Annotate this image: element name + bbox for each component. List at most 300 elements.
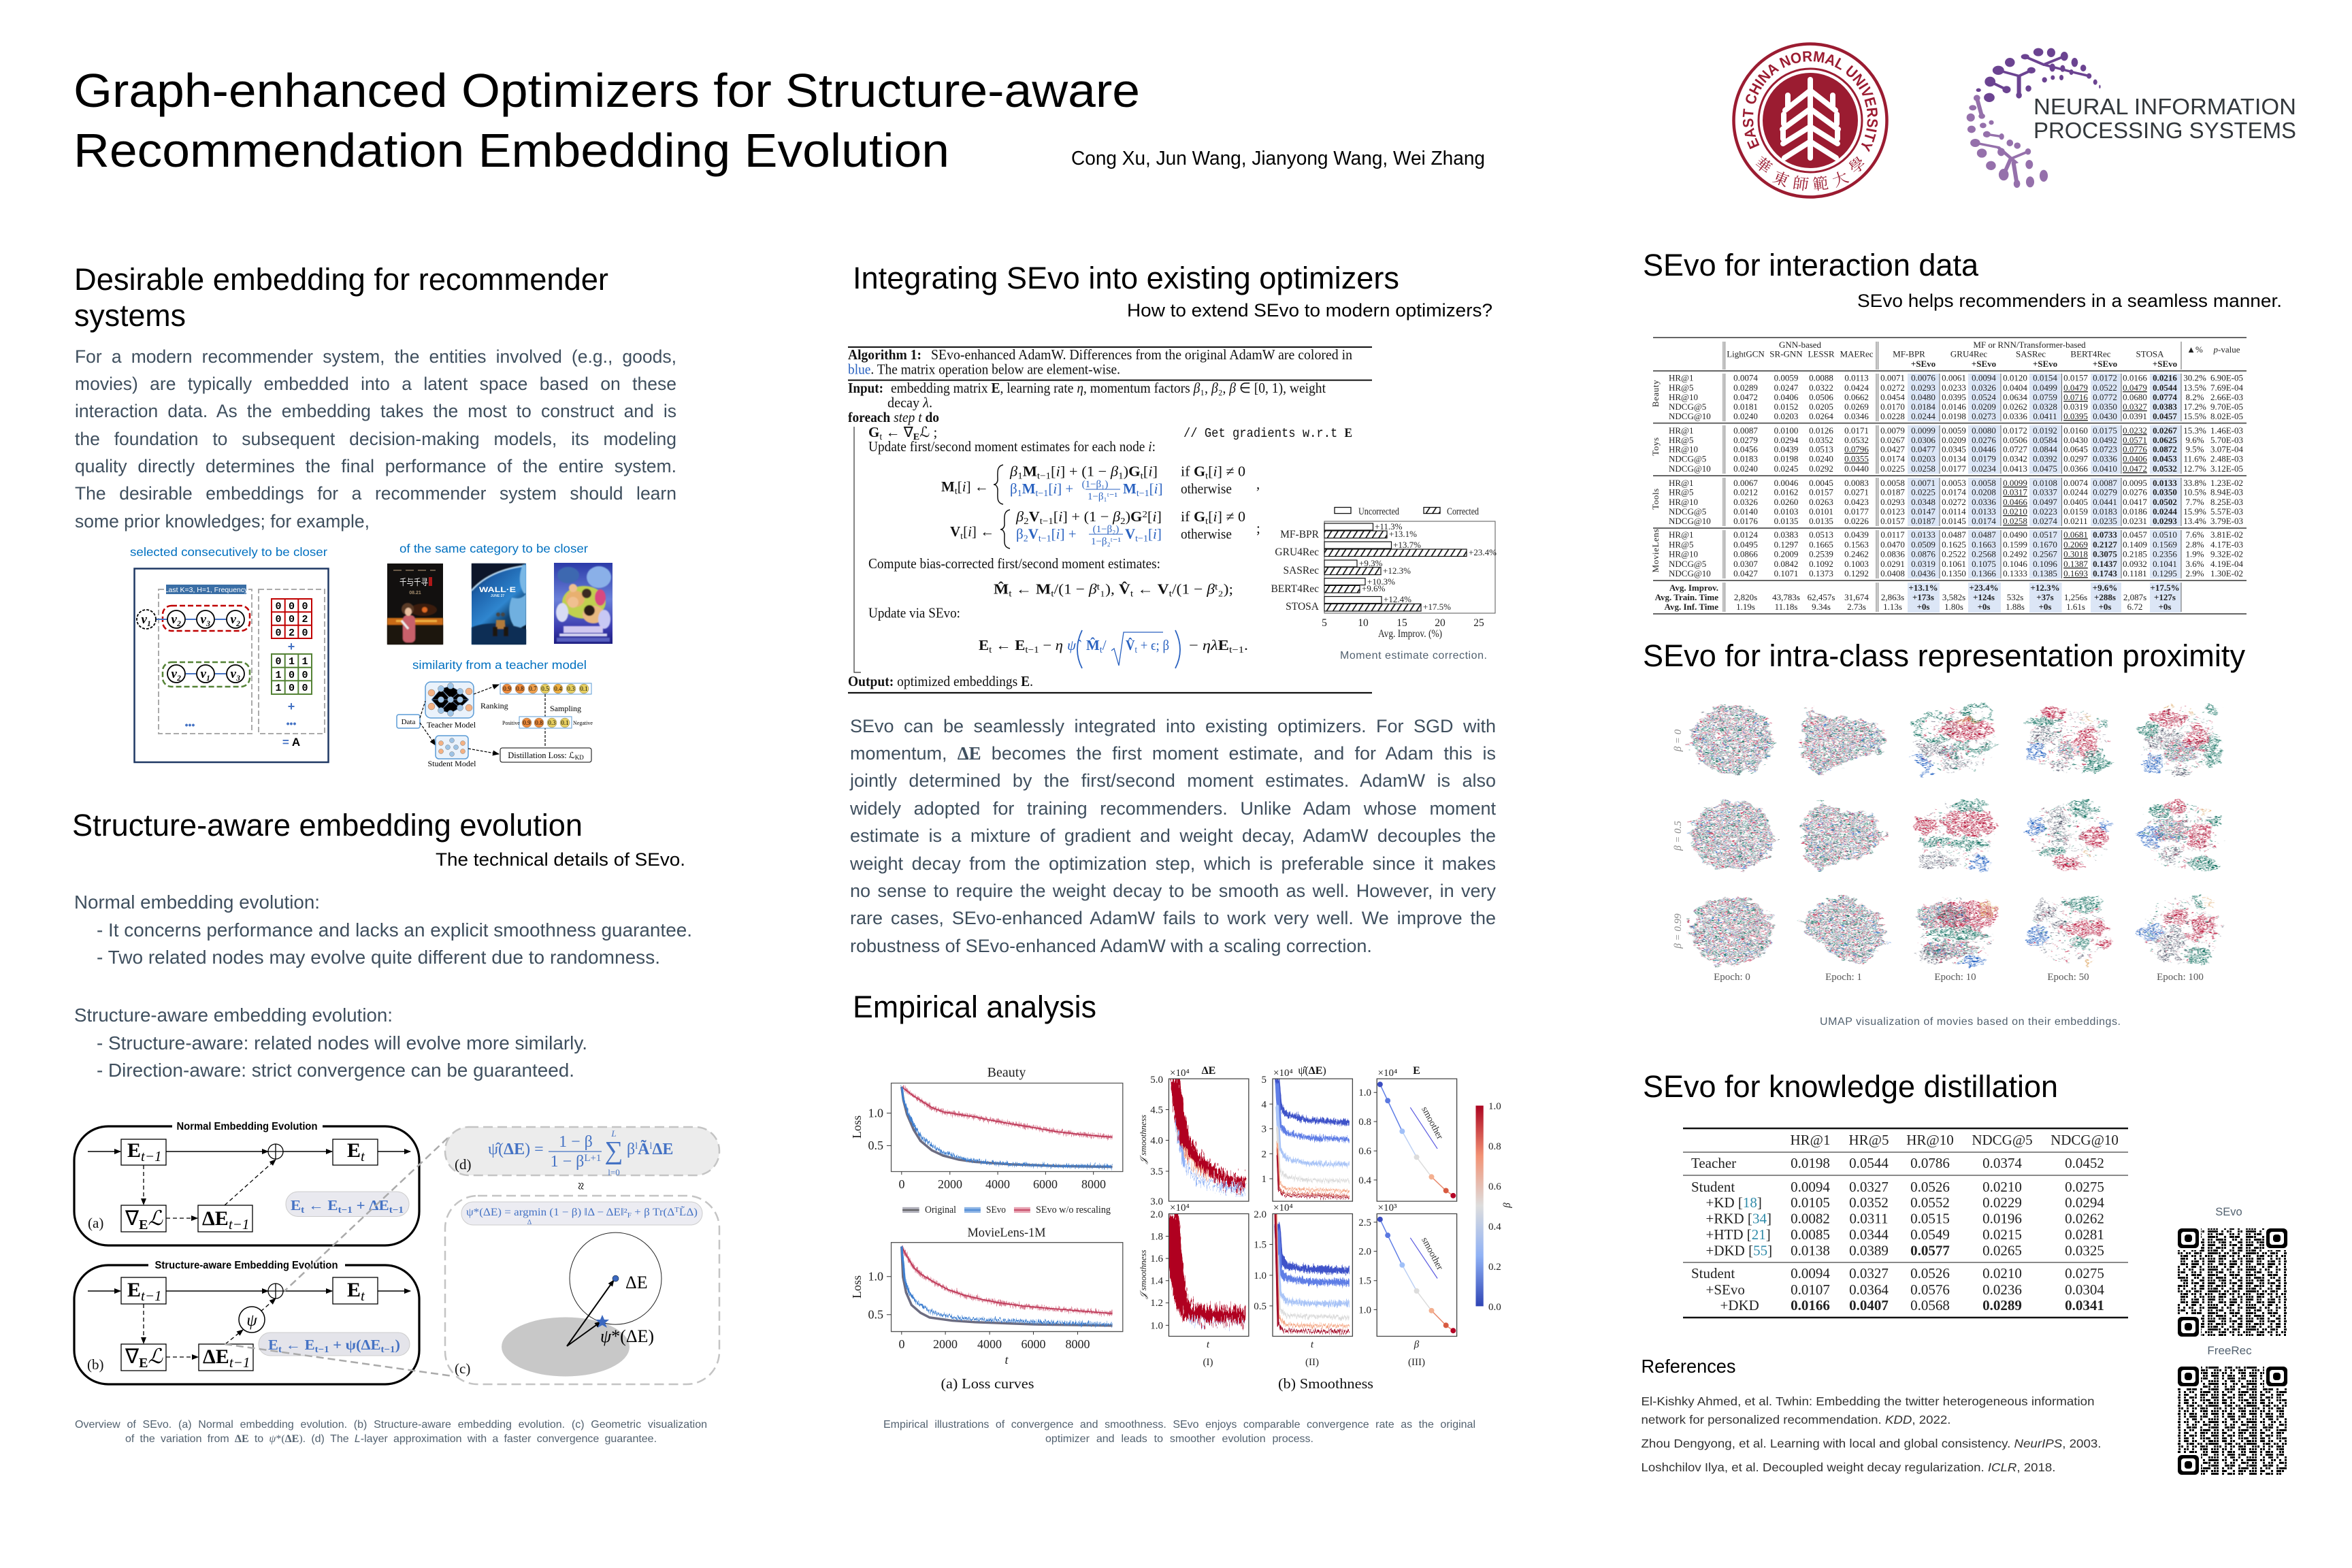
panel: sequence adjacency diagram: 0 xyxy=(301,683,308,694)
algorithm block: t−1 xyxy=(1039,534,1051,544)
table values: 1.80s xyxy=(1944,602,1963,612)
table values: 0.3018 xyxy=(2063,549,2088,559)
table values: 0.0328 xyxy=(2033,402,2057,412)
paragraph: integrating SEvo: estimate is a mixture of gradient and weight decay, AdamW decouples the xyxy=(850,826,1496,846)
metric names: NDCG@10 xyxy=(1669,516,1711,526)
table values: 6.72 xyxy=(2127,602,2142,612)
chart group: smoothness: ×10⁴ xyxy=(1170,1068,1190,1079)
scatter grid: UMAP visualization: Epoch: 1 xyxy=(1825,972,1862,983)
subheading: technical details: The technical details of SEvo. xyxy=(436,849,685,870)
table values: 0.0774 xyxy=(2153,392,2177,402)
table values: 0.0366 xyxy=(2063,463,2088,474)
table: knowledge distillation: 0.0304 xyxy=(2065,1281,2104,1298)
table values: 0.0759 xyxy=(2033,392,2057,402)
metric names: HR@1 xyxy=(1669,478,1694,488)
bar chart: moment estimate correction: +11.3% xyxy=(1375,521,1403,532)
caption: overview of SEvo: of the variation from ΔE to ψ*(ΔE). (d) The L-layer approximation with a faster convergence guarantee. xyxy=(125,1433,657,1445)
table values: 0.0192 xyxy=(2033,425,2057,436)
table values: 0.0157 xyxy=(1880,516,1905,526)
table values: 0.0391 xyxy=(2123,411,2147,421)
table values: 0.0866 xyxy=(1733,549,1758,559)
table values: 0.0733 xyxy=(2093,529,2117,540)
table: knowledge distillation: +SEvo xyxy=(1705,1281,1745,1298)
table values: 0.0172 xyxy=(2003,425,2027,436)
table values: 0.0126 xyxy=(1809,425,1833,436)
chart group: smoothness: 1.4 xyxy=(1150,1276,1164,1287)
table: knowledge distillation: 0.0265 xyxy=(1982,1243,2022,1259)
table values: 0.1437 xyxy=(2093,559,2117,569)
caption: empirical analysis: optimizer and leads to smoother evolution process. xyxy=(1045,1433,1313,1445)
table: knowledge distillation: 0.0094 xyxy=(1791,1265,1830,1281)
logo: East China Normal University: 華 xyxy=(1751,151,1777,178)
chart group: smoothness: 0.8 xyxy=(1488,1141,1501,1152)
table values: 0.0342 xyxy=(2003,454,2027,464)
table values: 0.0240 xyxy=(1733,411,1758,421)
table values: 8.94E-03 xyxy=(2210,487,2243,497)
QR code: SEvo xyxy=(2176,1206,2288,1338)
table values: 30.2% xyxy=(2183,373,2206,383)
table values: 2,087s xyxy=(2123,592,2146,602)
poster: spirited away: 千与千寻 xyxy=(399,575,428,588)
table: knowledge distillation: 0.0166 xyxy=(1791,1297,1830,1313)
table: knowledge distillation: HR@10 xyxy=(1906,1132,1954,1148)
panel: sequence adjacency diagram: 1 xyxy=(301,656,308,668)
table values: 0.0336 xyxy=(1972,497,1996,507)
table values: 0.0187 xyxy=(1911,516,1936,526)
panel c: geometric visualization: + β Tr(Δ xyxy=(632,1207,674,1218)
scatter grid: UMAP visualization: β = 0 xyxy=(1673,729,1684,752)
table: knowledge distillation: NDCG@5 xyxy=(1972,1132,2033,1148)
metric names: HR@5 xyxy=(1669,540,1694,550)
panel: sequence adjacency diagram: 1 xyxy=(275,683,282,694)
algorithm block: Compute bias-corrected first/second moment estimates: xyxy=(868,555,1160,572)
chart group: smoothness: 3 xyxy=(1262,1124,1267,1135)
bar chart: moment estimate correction: 25 xyxy=(1473,617,1484,629)
table values: +0s xyxy=(2099,602,2111,612)
table values: 7.6% xyxy=(2185,529,2204,540)
summary row labels: Avg. Improv. xyxy=(1669,583,1718,593)
table values: 0.0322 xyxy=(1809,382,1833,393)
table: knowledge distillation: 0.0568 xyxy=(1910,1297,1950,1313)
chart group: smoothness xyxy=(1138,1065,1513,1392)
diagram: teacher student distillation: Student Model xyxy=(427,759,476,768)
chart group: loss curves: Loss xyxy=(850,1275,864,1298)
algorithm block: ← xyxy=(1012,581,1036,598)
diagram: teacher student distillation: 0.4 xyxy=(554,685,562,692)
table values: 3,582s xyxy=(1942,592,1965,602)
panel: sequence adjacency diagram: v₁ xyxy=(200,667,211,681)
table: knowledge distillation: +HTD [21] xyxy=(1705,1226,1771,1243)
scatter grid: UMAP visualization xyxy=(1673,704,2222,1028)
paragraph: integrating SEvo: widely adopted for training recommenders. Unlike Adam whose moment xyxy=(850,798,1496,819)
metric names: NDCG@10 xyxy=(1669,568,1711,578)
table values: 0.1292 xyxy=(1844,568,1869,578)
table: knowledge distillation: 0.0407 xyxy=(1849,1297,1889,1313)
diagram: teacher student distillation: 0.1 xyxy=(561,719,569,726)
table values: 0.1350 xyxy=(1942,568,1966,578)
scatter grid: UMAP visualization: Epoch: 50 xyxy=(2047,972,2089,983)
table values: 0.0262 xyxy=(2003,402,2027,412)
table values: 0.0154 xyxy=(2033,373,2057,383)
paragraph: desirable embedding: The desirable embeddings for a recommender system should learn xyxy=(75,483,676,504)
paragraph: desirable embedding: some prior knowledges; for example, xyxy=(75,511,370,532)
panel b: structure-aware embedding evolution: (b) xyxy=(87,1356,103,1373)
table values: 0.0235 xyxy=(2093,516,2117,526)
panel a: normal embedding evolution: (a) xyxy=(88,1215,103,1231)
panel d: L-layer approximation: ≈ xyxy=(573,1183,588,1190)
algorithm block: t−1 xyxy=(1229,645,1244,655)
table values: 0.0179 xyxy=(1972,454,1996,464)
table values: 5.57E-03 xyxy=(2210,506,2243,517)
panel c: geometric visualization: ψ*(ΔE) = argmin (1 − β) ‖Δ − ΔE‖² xyxy=(466,1207,612,1218)
table values: 0.0410 xyxy=(2093,463,2117,474)
logo: East China Normal University: 師 xyxy=(1792,171,1810,195)
table values: 0.0133 xyxy=(1972,506,1996,517)
bar chart: moment estimate correction: 10 xyxy=(1358,617,1369,629)
chart group: smoothness: 1.5 xyxy=(1254,1240,1267,1251)
algorithm block: t xyxy=(1205,471,1208,482)
metric names: HR@5 xyxy=(1669,435,1694,445)
subheading: seamless manner: SEvo helps recommenders in a seamless manner. xyxy=(1857,291,2282,311)
algorithm block: [ xyxy=(958,478,962,495)
table header: +SEvo xyxy=(2153,359,2177,369)
scatter grid: UMAP visualization: Epoch: 10 xyxy=(1934,972,1976,983)
algorithm block: [i] + (1 − β xyxy=(1051,463,1117,479)
heading: interaction data: SEvo for interaction data xyxy=(1643,248,1979,282)
table values: 0.0441 xyxy=(2093,497,2117,507)
algorithm block: M xyxy=(1023,463,1037,479)
panel a: normal embedding evolution: t−1 xyxy=(338,1205,353,1215)
panel a: normal embedding evolution xyxy=(74,1121,419,1245)
algorithm block: β xyxy=(1088,581,1097,598)
table values: 0.0120 xyxy=(2003,373,2027,383)
algorithm block: t−1 xyxy=(1135,534,1148,544)
caption: empirical analysis xyxy=(883,1419,1475,1445)
algorithm block: foreach step t do xyxy=(848,409,939,425)
metric names: HR@5 xyxy=(1669,487,1694,497)
QR code: FreeRec: FreeRec xyxy=(2207,1344,2252,1357)
chart group: smoothness: E xyxy=(1413,1065,1420,1077)
table values: 0.0502 xyxy=(2153,497,2177,507)
table values: 0.0171 xyxy=(1844,425,1869,436)
table values: 0.0162 xyxy=(1774,487,1798,497)
table values: 0.0087 xyxy=(2093,478,2117,488)
algorithm block: t xyxy=(1169,589,1172,600)
diagram: teacher student distillation: Ranking xyxy=(480,701,508,710)
table values: 0.0348 xyxy=(1911,497,1936,507)
panel a: normal embedding evolution: + ΔE xyxy=(353,1197,389,1213)
table values: 1.13s xyxy=(1883,602,1902,612)
panel: sequence adjacency diagram: 0 xyxy=(301,627,308,639)
chart group: loss curves: Beauty xyxy=(987,1065,1026,1080)
table values: 0.0480 xyxy=(1911,392,1936,402)
table values: 15.3% xyxy=(2183,425,2206,436)
algorithm block: 1 xyxy=(1017,489,1022,499)
table values: 532s xyxy=(2007,592,2023,602)
chart group: loss curves: t xyxy=(1004,1353,1009,1367)
chart group: smoothness: ×10⁴ xyxy=(1273,1068,1293,1079)
algorithm block: 1 xyxy=(1017,471,1023,482)
chart group: smoothness: 0.4 xyxy=(1488,1222,1501,1232)
table values: 7.69E-04 xyxy=(2210,382,2244,393)
references: El-Kishky Ahmed, et al. Twhin: Embedding the twitter heterogeneous information xyxy=(1642,1394,2095,1408)
chart group: smoothness: 0.4 xyxy=(1358,1175,1372,1186)
table header: STOSA xyxy=(2136,348,2164,359)
table values: 0.0113 xyxy=(1844,373,1869,383)
table values: 17.2% xyxy=(2183,402,2206,412)
table values: +13.1% xyxy=(1908,583,1938,593)
scatter grid: UMAP visualization: Epoch: 100 xyxy=(2157,972,2204,983)
table values: 0.0145 xyxy=(1942,516,1966,526)
table values: 0.0479 xyxy=(2063,382,2088,393)
table values: 0.0279 xyxy=(2093,487,2117,497)
algorithm block: t xyxy=(1051,589,1054,600)
table values: 0.0336 xyxy=(2003,411,2027,421)
algorithm block: Output: optimized embeddings E. xyxy=(848,673,1033,689)
table values: 0.0411 xyxy=(2033,411,2057,421)
diagram: teacher student distillation: Positive xyxy=(502,720,520,726)
table header: MF-BPR xyxy=(1893,348,1925,359)
algorithm block: − xyxy=(1039,637,1056,653)
table: knowledge distillation: 0.0549 xyxy=(1910,1226,1950,1243)
table header: LESSR xyxy=(1808,348,1835,359)
heading: empirical analysis: Empirical analysis xyxy=(853,990,1096,1024)
table values: 0.0046 xyxy=(1774,478,1799,488)
panel: sequence adjacency diagram: 1 xyxy=(289,656,295,668)
algorithm block: // Get gradients w.r.t E xyxy=(1183,426,1352,441)
panel d: L-layer approximation: 1 − β xyxy=(559,1133,593,1151)
algorithm block: Update via SEvo: xyxy=(868,605,960,621)
table values: 0.0187 xyxy=(1880,487,1905,497)
table values: 0.0147 xyxy=(1911,506,1936,517)
algorithm block: M xyxy=(1022,480,1036,497)
table values: 0.0477 xyxy=(1911,444,1936,455)
table values: 9.70E-05 xyxy=(2210,402,2243,412)
table: knowledge distillation: 0.0085 xyxy=(1791,1226,1830,1243)
table values: 0.0842 xyxy=(1774,559,1798,569)
chart group: loss curves: 1.0 xyxy=(868,1270,883,1284)
algorithm block: V xyxy=(1028,525,1039,542)
table values: 0.0135 xyxy=(1774,516,1798,526)
label: teacher similarity: similarity from a teacher model xyxy=(412,658,587,672)
algorithm block xyxy=(848,346,1372,693)
diagram: teacher student distillation: 0.9 xyxy=(503,685,511,692)
text block: normal vs structure aware: Structure-aware embedding evolution: xyxy=(74,1004,393,1026)
QR code: SEvo: SEvo xyxy=(2215,1206,2242,1218)
chart group: smoothness: 1 xyxy=(1262,1174,1267,1185)
table values: +173s xyxy=(1912,592,1934,602)
panel a: normal embedding evolution: t xyxy=(301,1205,305,1215)
dataset labels: MovieLens xyxy=(1650,529,1661,572)
chart group: smoothness: 1.5 xyxy=(1358,1276,1371,1287)
dataset labels: Toys xyxy=(1650,437,1661,456)
paragraph: integrating SEvo xyxy=(849,716,1496,956)
metric names: NDCG@5 xyxy=(1669,506,1706,517)
table values: 0.0186 xyxy=(2123,506,2147,517)
table values: 0.0307 xyxy=(1733,559,1758,569)
logo: East China Normal University: 範 xyxy=(1811,171,1829,195)
table values: 0.0228 xyxy=(1880,411,1905,421)
table values: 0.0174 xyxy=(1880,454,1905,464)
panel: sequence adjacency diagram: 0 xyxy=(289,683,295,694)
table values: 0.0776 xyxy=(2123,444,2147,455)
algorithm block: β xyxy=(1016,525,1024,542)
scatter grid: UMAP visualization: β = 0.5 xyxy=(1673,821,1684,851)
panel c: geometric visualization: L̃Δ) xyxy=(679,1207,698,1218)
panel: sequence adjacency diagram: 0 xyxy=(289,614,295,625)
chart group: smoothness: 1.2 xyxy=(1150,1298,1163,1309)
table values: 0.0395 xyxy=(2063,411,2088,421)
panel: sequence adjacency diagram: 0 xyxy=(275,601,282,612)
table values: 0.0497 xyxy=(2033,497,2057,507)
chart group: loss curves: 8000 xyxy=(1066,1337,1090,1351)
table: knowledge distillation: 0.0374 xyxy=(1982,1155,2022,1171)
table: knowledge distillation: 0.0210 xyxy=(1982,1265,2022,1281)
table values: 1.9% xyxy=(2185,549,2204,559)
metric names: HR@1 xyxy=(1669,373,1694,383)
table values: 0.0532 xyxy=(2153,463,2177,474)
table: knowledge distillation: 0.0215 xyxy=(1982,1226,2022,1243)
table values: 2,863s xyxy=(1881,592,1904,602)
paragraph: desirable embedding: movies) are typically embedded into a latent space based on these xyxy=(75,374,676,394)
table values: 11.6% xyxy=(2183,454,2206,464)
table values: 0.0058 xyxy=(1972,478,1996,488)
table: knowledge distillation: 0.0389 xyxy=(1849,1243,1889,1259)
table values: 0.0247 xyxy=(1774,382,1799,393)
chart group: smoothness: 1.0 xyxy=(1150,1320,1163,1331)
table values: 0.0267 xyxy=(1880,435,1905,445)
table values: 1,256s xyxy=(2064,592,2087,602)
metric names: HR@5 xyxy=(1669,382,1694,393)
table values: 0.0260 xyxy=(1774,497,1798,507)
algorithm block: ℒ ; xyxy=(919,424,937,440)
table values: 0.0427 xyxy=(1733,568,1758,578)
table values: 0.0932 xyxy=(2123,559,2147,569)
table values: 15.9% xyxy=(2183,506,2206,517)
summary row labels: Avg. Train. Time xyxy=(1655,592,1718,602)
references: Loshchilov Ilya, et al. Decoupled weight decay regularization. ICLR, 2018. xyxy=(1642,1460,2055,1474)
table values: 31,674 xyxy=(1844,592,1869,602)
table values: 0.0198 xyxy=(1942,411,1966,421)
table: knowledge distillation: HR@5 xyxy=(1848,1132,1889,1148)
panel d: L-layer approximation: Ã xyxy=(638,1141,650,1158)
chart group: smoothness: 2.0 xyxy=(1358,1247,1371,1258)
metric names: HR@1 xyxy=(1669,529,1694,540)
panel b: structure-aware embedding evolution: E xyxy=(139,1356,148,1371)
algorithm block: i] ← xyxy=(962,478,989,495)
algorithm block: 1−β₂ᵗ⁻¹ xyxy=(1091,536,1121,547)
poster: wall-e: WALL·E xyxy=(479,586,516,594)
algorithm block: Input: xyxy=(848,380,883,396)
table values: 0.0152 xyxy=(1774,402,1798,412)
table values: 0.1181 xyxy=(2123,568,2147,578)
caption: moment correction: Moment estimate correction. xyxy=(1340,650,1487,662)
table values: 4.19E-04 xyxy=(2210,559,2244,569)
table values: 0.0681 xyxy=(2063,529,2088,540)
table header: +SEvo xyxy=(1911,359,1936,369)
logo: NeurIPS xyxy=(1967,48,2296,188)
table values: 0.0175 xyxy=(2093,425,2117,436)
bar chart: moment estimate correction: 15 xyxy=(1396,617,1407,629)
table values: 0.0291 xyxy=(1880,559,1905,569)
metric names: NDCG@5 xyxy=(1669,402,1706,412)
algorithm block: i] ← xyxy=(968,523,994,540)
table values: 0.0263 xyxy=(1809,497,1833,507)
paragraph: integrating SEvo: rare cases, SEvo-enhanced AdamW fails to work very well. We improve the xyxy=(850,908,1496,928)
panel b: structure-aware embedding evolution: E xyxy=(127,1279,141,1301)
table values: 0.0212 xyxy=(1733,487,1758,497)
QR code: FreeRec xyxy=(2176,1344,2288,1477)
panel a: normal embedding evolution: ℒ xyxy=(148,1207,163,1230)
chart group: loss curves: 4000 xyxy=(985,1177,1010,1191)
table values: 1.88s xyxy=(2006,602,2025,612)
table values: +0s xyxy=(1917,602,1929,612)
table values: 0.0487 xyxy=(1942,529,1966,540)
table values: 0.0513 xyxy=(1809,529,1833,540)
table values: 0.0439 xyxy=(1774,444,1798,455)
table values: 0.0446 xyxy=(1972,444,1996,455)
panel c: geometric visualization: F xyxy=(627,1212,632,1220)
table values: 0.0205 xyxy=(1809,402,1833,412)
table values: 0.2462 xyxy=(1844,549,1869,559)
table values: 11.18s xyxy=(1775,602,1797,612)
table values: 0.0294 xyxy=(1774,435,1799,445)
table values: 0.0157 xyxy=(1809,487,1833,497)
table values: 2,820s xyxy=(1734,592,1757,602)
diagram: teacher student distillation: 0.3 xyxy=(548,719,556,726)
table values: 0.1092 xyxy=(1809,559,1833,569)
table values: 5.70E-03 xyxy=(2210,435,2243,445)
panel c: geometric visualization: (c) xyxy=(455,1360,470,1377)
table values: 0.0634 xyxy=(2003,392,2027,402)
paragraph: integrating SEvo: weight decay from the optimization step, which is preferable since it makes xyxy=(850,853,1496,874)
chart group: smoothness: ×10⁴ xyxy=(1273,1203,1293,1213)
chart group: smoothness: β xyxy=(1414,1339,1420,1350)
bar chart: moment estimate correction: +9.6% xyxy=(1362,583,1386,593)
table header: MF or RNN/Transformer-based xyxy=(1973,340,2086,350)
algorithm block: G xyxy=(1130,508,1142,525)
table values: 0.0074 xyxy=(2063,478,2088,488)
chart group: loss curves: SEvo w/o rescaling xyxy=(1036,1205,1111,1215)
table values: 0.1563 xyxy=(1844,540,1869,550)
chart group: smoothness: 3.5 xyxy=(1150,1166,1163,1177)
references: Zhou Dengyong, et al. Learning with local and global consistency. NeurIPS , 2003. xyxy=(1642,1437,2102,1450)
panel d: L-layer approximation: ∑ xyxy=(604,1137,623,1165)
chart group: loss curves: 0 xyxy=(898,1337,905,1351)
table values: 10.5% xyxy=(2183,487,2206,497)
table values: 0.1569 xyxy=(2153,540,2177,550)
algorithm block: [i] xyxy=(1143,463,1158,479)
chart group: smoothness: 0.6 xyxy=(1488,1181,1501,1192)
table values: 0.0395 xyxy=(1942,392,1966,402)
diagram: teacher student distillation xyxy=(397,682,593,768)
table values: 0.0045 xyxy=(1809,478,1833,488)
table values: 0.0087 xyxy=(1733,425,1758,436)
chart group: smoothness: 0.8 xyxy=(1358,1117,1371,1128)
table values: 12.7% xyxy=(2183,463,2206,474)
chart group: loss curves: (a) Loss curves xyxy=(941,1375,1034,1392)
panel b: structure-aware embedding evolution: + ψ(ΔE xyxy=(329,1337,381,1353)
table values: 0.1297 xyxy=(1774,540,1799,550)
table values: 0.0454 xyxy=(1880,392,1905,402)
table values: 0.0101 xyxy=(1809,506,1833,517)
chart group: smoothness: 0.5 xyxy=(1254,1301,1267,1312)
diagram: teacher student distillation: 0.1 xyxy=(580,685,588,692)
panel: sequence adjacency diagram: v₁ xyxy=(141,612,152,627)
table values: 0.0160 xyxy=(2063,425,2088,436)
table values: 0.0114 xyxy=(1942,506,1966,517)
chart group: smoothness: t xyxy=(1207,1339,1210,1350)
